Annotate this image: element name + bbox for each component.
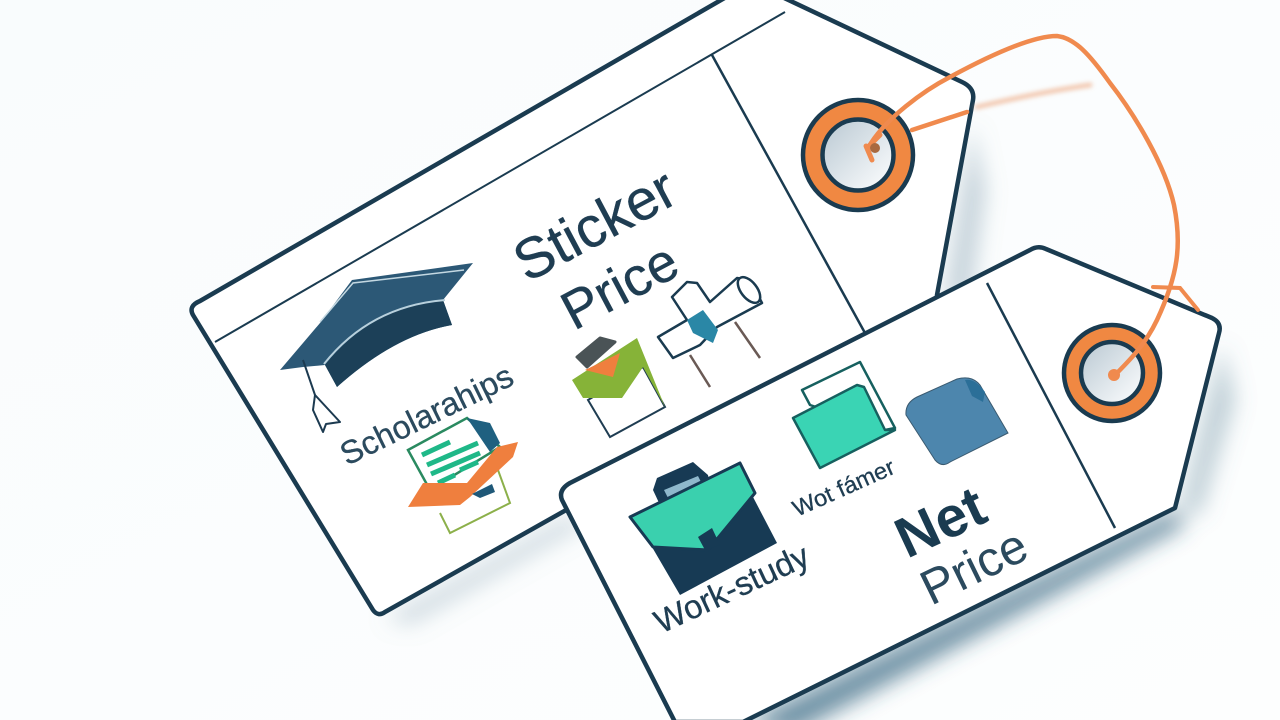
eyelet: sticker tag (803, 100, 913, 210)
tag shadows (385, 125, 1235, 720)
heading: Net Price: Price (912, 518, 1036, 616)
tag: sticker price (192, 0, 973, 614)
icon: briefcase (630, 462, 777, 595)
icon: checked folder (572, 338, 665, 437)
heading: Sticker Price: Sticker (503, 156, 687, 294)
icon: graduation cap (280, 263, 473, 432)
icon: diploma (658, 273, 765, 387)
label: Work-partner: Wot fámer (788, 453, 899, 522)
heading: Net Price: Net (885, 474, 996, 571)
heading: Net Price (885, 474, 1036, 616)
label: Scholarships: Scholarahips (334, 358, 519, 472)
tag: net price (561, 247, 1220, 720)
heading: Sticker Price: Price (551, 231, 688, 342)
icon: scholarship document (408, 418, 518, 533)
label: Work-study: Work-study (648, 536, 815, 640)
icon: blue folder (906, 378, 1008, 465)
icon: teal folder (793, 362, 895, 468)
eyelet: net tag (1064, 325, 1160, 421)
string: orange cord (866, 36, 1198, 381)
